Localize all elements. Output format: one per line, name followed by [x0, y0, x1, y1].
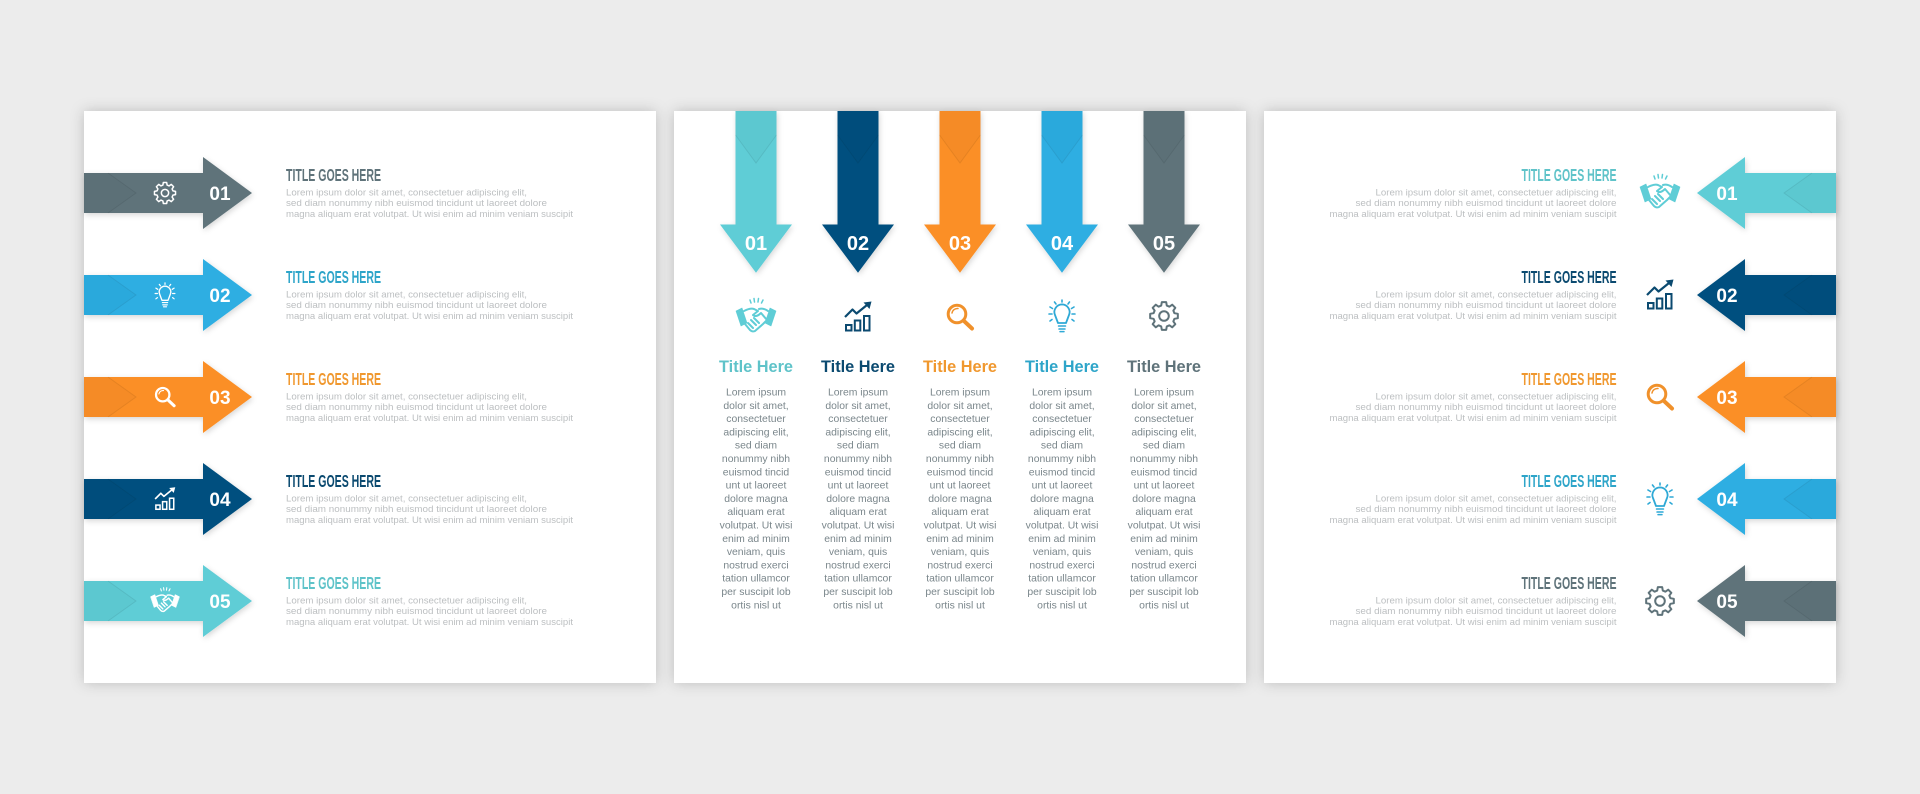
- body 05: tation ullamcor: [1130, 574, 1198, 585]
- title 03: Title Here: [923, 357, 997, 376]
- title 03: TITLE GOES HERE: [1522, 369, 1616, 389]
- title 01: Title Here: [719, 357, 793, 376]
- body 04: Lorem ipsum: [1032, 388, 1092, 398]
- body 03: unt ut laoreet: [930, 481, 990, 492]
- body 04: nonummy nibh: [1028, 454, 1096, 465]
- body 01: nostrud exerci: [723, 560, 789, 571]
- item 03: [1330, 361, 1836, 433]
- title 05: TITLE GOES HERE: [1522, 573, 1616, 593]
- body 05: sed diam: [1143, 441, 1185, 452]
- description 05: Lorem ipsum dolor sit amet, consectetuer adipiscing elit,: [1376, 596, 1616, 606]
- body 04: dolore magna: [1030, 494, 1094, 505]
- title 02: TITLE GOES HERE: [1522, 267, 1616, 287]
- body 02: volutpat. Ut wisi: [822, 520, 894, 532]
- icon: light bulb: [1647, 483, 1673, 515]
- number 01: 01: [1716, 184, 1738, 205]
- body 03: veniam, quis: [931, 547, 989, 558]
- number 04: 04: [209, 490, 231, 511]
- column 01: [719, 111, 793, 611]
- description 04: Lorem ipsum dolor sit amet, consectetuer adipiscing elit,: [286, 494, 527, 504]
- body 01: aliquam erat: [727, 507, 785, 518]
- description 03: [1330, 392, 1617, 424]
- title 03: TITLE GOES HERE: [286, 369, 381, 389]
- item 05: [84, 565, 573, 637]
- body 01: nonummy nibh: [722, 454, 790, 465]
- body 03: nonummy nibh: [926, 454, 994, 465]
- description 01: Lorem ipsum dolor sit amet, consectetuer adipiscing elit,: [1376, 188, 1616, 198]
- body 01: unt ut laoreet: [726, 481, 786, 492]
- number 05: 05: [1153, 233, 1175, 255]
- body 03: sed diam: [939, 441, 981, 452]
- body 03: dolore magna: [928, 494, 992, 505]
- description 02: magna aliquam erat volutpat. Ut wisi enim ad minim veniam suscipit: [286, 311, 573, 322]
- body 01: volutpat. Ut wisi: [720, 520, 792, 532]
- body 04: per suscipit lob: [1027, 587, 1097, 598]
- body 01: enim ad minim: [722, 534, 790, 545]
- column 02: [821, 111, 895, 611]
- body 03: Lorem ipsum: [930, 388, 990, 398]
- description 01: sed diam nonummy nibh euismod tincidunt ut laoreet dolore: [1356, 198, 1616, 209]
- item 01: [84, 157, 573, 229]
- body 02: tation ullamcor: [824, 574, 892, 585]
- body 01: euismod tincid: [723, 467, 789, 478]
- panel: left arrows: [84, 111, 656, 683]
- panel: right arrows: [1264, 111, 1836, 683]
- body 04: consectetuer: [1032, 414, 1092, 425]
- icon: magnifier: [156, 388, 174, 406]
- body 04: adipiscing elit,: [1029, 427, 1095, 438]
- number 03: 03: [949, 233, 971, 255]
- title 01: TITLE GOES HERE: [286, 165, 381, 185]
- body 02: veniam, quis: [829, 547, 887, 558]
- description 04: [286, 494, 573, 526]
- icon: light bulb: [155, 283, 175, 307]
- body 01: dolore magna: [724, 494, 788, 505]
- description 05: [286, 596, 573, 628]
- icon: magnifier: [948, 305, 972, 328]
- body 02: unt ut laoreet: [828, 481, 888, 492]
- body 05: euismod tincid: [1131, 467, 1197, 478]
- icon: growth chart: [845, 302, 872, 330]
- title 02: Title Here: [821, 357, 895, 376]
- body 03: enim ad minim: [926, 534, 994, 545]
- description 01: [1330, 188, 1617, 220]
- arrow 05: [1128, 111, 1200, 273]
- icon: handshake: [1640, 174, 1680, 207]
- arrow 02: [822, 111, 894, 273]
- body 04: veniam, quis: [1033, 547, 1091, 558]
- number 04: 04: [1716, 490, 1738, 511]
- description 04: magna aliquam erat volutpat. Ut wisi enim ad minim veniam suscipit: [1330, 515, 1617, 526]
- body 04: tation ullamcor: [1028, 574, 1096, 585]
- body 04: euismod tincid: [1029, 467, 1095, 478]
- body 02: nonummy nibh: [824, 454, 892, 465]
- body 04: dolor sit amet,: [1029, 401, 1095, 412]
- arrow 05: [84, 565, 252, 637]
- description 05: [1330, 596, 1617, 628]
- body 04: sed diam: [1041, 441, 1083, 452]
- body 05: Lorem ipsum: [1134, 388, 1194, 398]
- body 05: nostrud exerci: [1131, 560, 1197, 571]
- description 02: sed diam nonummy nibh euismod tincidunt ut laoreet dolore: [286, 300, 547, 311]
- description 01: magna aliquam erat volutpat. Ut wisi enim ad minim veniam suscipit: [286, 209, 573, 220]
- body 04: ortis nisl ut: [1037, 600, 1087, 611]
- body 02: enim ad minim: [824, 534, 892, 545]
- body 04: volutpat. Ut wisi: [1026, 520, 1098, 532]
- body 03: adipiscing elit,: [927, 427, 993, 438]
- body 02: adipiscing elit,: [825, 427, 891, 438]
- body 05: nonummy nibh: [1130, 454, 1198, 465]
- body 03: aliquam erat: [931, 507, 989, 518]
- body 04: enim ad minim: [1028, 534, 1096, 545]
- body 05: adipiscing elit,: [1131, 427, 1197, 438]
- number 02: 02: [847, 233, 869, 255]
- description 02: magna aliquam erat volutpat. Ut wisi enim ad minim veniam suscipit: [1330, 311, 1617, 322]
- title 02: TITLE GOES HERE: [286, 267, 381, 287]
- body 05: consectetuer: [1134, 414, 1194, 425]
- body 01: per suscipit lob: [721, 587, 791, 598]
- description 05: magna aliquam erat volutpat. Ut wisi enim ad minim veniam suscipit: [1330, 617, 1617, 628]
- description 03: Lorem ipsum dolor sit amet, consectetuer adipiscing elit,: [286, 392, 527, 402]
- number 02: 02: [1716, 286, 1738, 307]
- body 01: dolor sit amet,: [723, 401, 789, 412]
- body 03: euismod tincid: [927, 467, 993, 478]
- arrow 04: [84, 463, 252, 535]
- description 01: [286, 188, 573, 220]
- body 02: dolore magna: [826, 494, 890, 505]
- body 01: sed diam: [735, 441, 777, 452]
- description 05: sed diam nonummy nibh euismod tincidunt ut laoreet dolore: [1356, 606, 1616, 617]
- body 01: consectetuer: [726, 414, 786, 425]
- panel: down arrows: [674, 111, 1246, 683]
- body 02: dolor sit amet,: [825, 401, 891, 412]
- body 02: consectetuer: [828, 414, 888, 425]
- icon: light bulb: [1049, 300, 1075, 332]
- number 01: 01: [209, 184, 231, 205]
- number 03: 03: [1716, 388, 1738, 409]
- number 05: 05: [1716, 592, 1738, 613]
- arrow 03: [84, 361, 252, 433]
- body 05: volutpat. Ut wisi: [1128, 520, 1200, 532]
- number 01: 01: [745, 233, 767, 255]
- description 05: sed diam nonummy nibh euismod tincidunt ut laoreet dolore: [286, 606, 547, 617]
- column 05: [1127, 111, 1201, 611]
- item 02: [84, 259, 573, 331]
- body 02: nostrud exerci: [825, 560, 891, 571]
- icon: handshake: [151, 588, 179, 611]
- number 03: 03: [209, 388, 231, 409]
- body 05: enim ad minim: [1130, 534, 1198, 545]
- body 03: ortis nisl ut: [935, 600, 985, 611]
- body 04: aliquam erat: [1033, 507, 1091, 518]
- body 01: veniam, quis: [727, 547, 785, 558]
- number 05: 05: [209, 592, 231, 613]
- body 02: aliquam erat: [829, 507, 887, 518]
- body 01: adipiscing elit,: [723, 427, 789, 438]
- body 01: ortis nisl ut: [731, 600, 781, 611]
- icon: growth chart: [1647, 280, 1674, 308]
- body 03: nostrud exerci: [927, 560, 993, 571]
- body 02: sed diam: [837, 441, 879, 452]
- title 01: TITLE GOES HERE: [1522, 165, 1616, 185]
- icon: gear: [1646, 587, 1674, 615]
- item 02: [1330, 259, 1836, 331]
- description 02: sed diam nonummy nibh euismod tincidunt ut laoreet dolore: [1356, 300, 1616, 311]
- description 02: Lorem ipsum dolor sit amet, consectetuer adipiscing elit,: [286, 290, 527, 300]
- icon: gear: [154, 182, 176, 204]
- description 02: Lorem ipsum dolor sit amet, consectetuer adipiscing elit,: [1376, 290, 1616, 300]
- body 01: tation ullamcor: [722, 574, 790, 585]
- icon: magnifier: [1648, 385, 1672, 408]
- body 03: tation ullamcor: [926, 574, 994, 585]
- number 04: 04: [1051, 233, 1074, 255]
- arrow 02: [84, 259, 252, 331]
- body 05: per suscipit lob: [1129, 587, 1199, 598]
- arrow 01: [84, 157, 252, 229]
- body 02: Lorem ipsum: [828, 388, 888, 398]
- description 03: sed diam nonummy nibh euismod tincidunt ut laoreet dolore: [1356, 402, 1616, 413]
- description 02: [286, 290, 573, 322]
- description 01: sed diam nonummy nibh euismod tincidunt ut laoreet dolore: [286, 198, 547, 209]
- description 05: magna aliquam erat volutpat. Ut wisi enim ad minim veniam suscipit: [286, 617, 573, 628]
- item 04: [84, 463, 573, 535]
- icon: growth chart: [155, 487, 175, 509]
- body 03: consectetuer: [930, 414, 990, 425]
- description 03: sed diam nonummy nibh euismod tincidunt ut laoreet dolore: [286, 402, 547, 413]
- description 02: [1330, 290, 1617, 322]
- body 05: veniam, quis: [1135, 547, 1193, 558]
- title 04: TITLE GOES HERE: [1522, 471, 1616, 491]
- body 05: unt ut laoreet: [1134, 481, 1194, 492]
- column 04: [1025, 111, 1099, 611]
- description 03: [286, 392, 573, 424]
- arrow 04: [1026, 111, 1098, 273]
- description 01: Lorem ipsum dolor sit amet, consectetuer adipiscing elit,: [286, 188, 527, 198]
- item 05: [1330, 565, 1836, 637]
- item 04: [1330, 463, 1836, 535]
- item 01: [1330, 157, 1836, 229]
- column 03: [923, 111, 997, 611]
- description 04: [1330, 494, 1617, 526]
- body 05: dolore magna: [1132, 494, 1196, 505]
- description 04: Lorem ipsum dolor sit amet, consectetuer adipiscing elit,: [1376, 494, 1616, 504]
- description 04: magna aliquam erat volutpat. Ut wisi enim ad minim veniam suscipit: [286, 515, 573, 526]
- body 05: aliquam erat: [1135, 507, 1193, 518]
- arrow 03: [924, 111, 996, 273]
- description 01: magna aliquam erat volutpat. Ut wisi enim ad minim veniam suscipit: [1330, 209, 1617, 220]
- item 03: [84, 361, 573, 433]
- title 05: TITLE GOES HERE: [286, 573, 381, 593]
- body 03: per suscipit lob: [925, 587, 995, 598]
- number 02: 02: [209, 286, 231, 307]
- body 05: ortis nisl ut: [1139, 600, 1189, 611]
- body 03: volutpat. Ut wisi: [924, 520, 996, 532]
- arrow 04: [1697, 463, 1836, 535]
- body 05: dolor sit amet,: [1131, 401, 1197, 412]
- description 03: Lorem ipsum dolor sit amet, consectetuer adipiscing elit,: [1376, 392, 1616, 402]
- body 02: ortis nisl ut: [833, 600, 883, 611]
- arrow 05: [1697, 565, 1836, 637]
- body 02: euismod tincid: [825, 467, 891, 478]
- arrow 03: [1697, 361, 1836, 433]
- body 01: Lorem ipsum: [726, 388, 786, 398]
- description 03: magna aliquam erat volutpat. Ut wisi enim ad minim veniam suscipit: [1330, 413, 1617, 424]
- body 02: per suscipit lob: [823, 587, 893, 598]
- body 04: unt ut laoreet: [1032, 481, 1092, 492]
- arrow 02: [1697, 259, 1836, 331]
- title 04: TITLE GOES HERE: [286, 471, 381, 491]
- title 05: Title Here: [1127, 357, 1201, 376]
- title 04: Title Here: [1025, 357, 1099, 376]
- description 04: sed diam nonummy nibh euismod tincidunt ut laoreet dolore: [1356, 504, 1616, 515]
- arrow 01: [1697, 157, 1836, 229]
- description 04: sed diam nonummy nibh euismod tincidunt ut laoreet dolore: [286, 504, 547, 515]
- arrow 01: [720, 111, 792, 273]
- body 03: dolor sit amet,: [927, 401, 993, 412]
- icon: gear: [1150, 302, 1178, 330]
- description 03: magna aliquam erat volutpat. Ut wisi enim ad minim veniam suscipit: [286, 413, 573, 424]
- icon: handshake: [736, 298, 776, 331]
- body 04: nostrud exerci: [1029, 560, 1095, 571]
- description 05: Lorem ipsum dolor sit amet, consectetuer adipiscing elit,: [286, 596, 527, 606]
